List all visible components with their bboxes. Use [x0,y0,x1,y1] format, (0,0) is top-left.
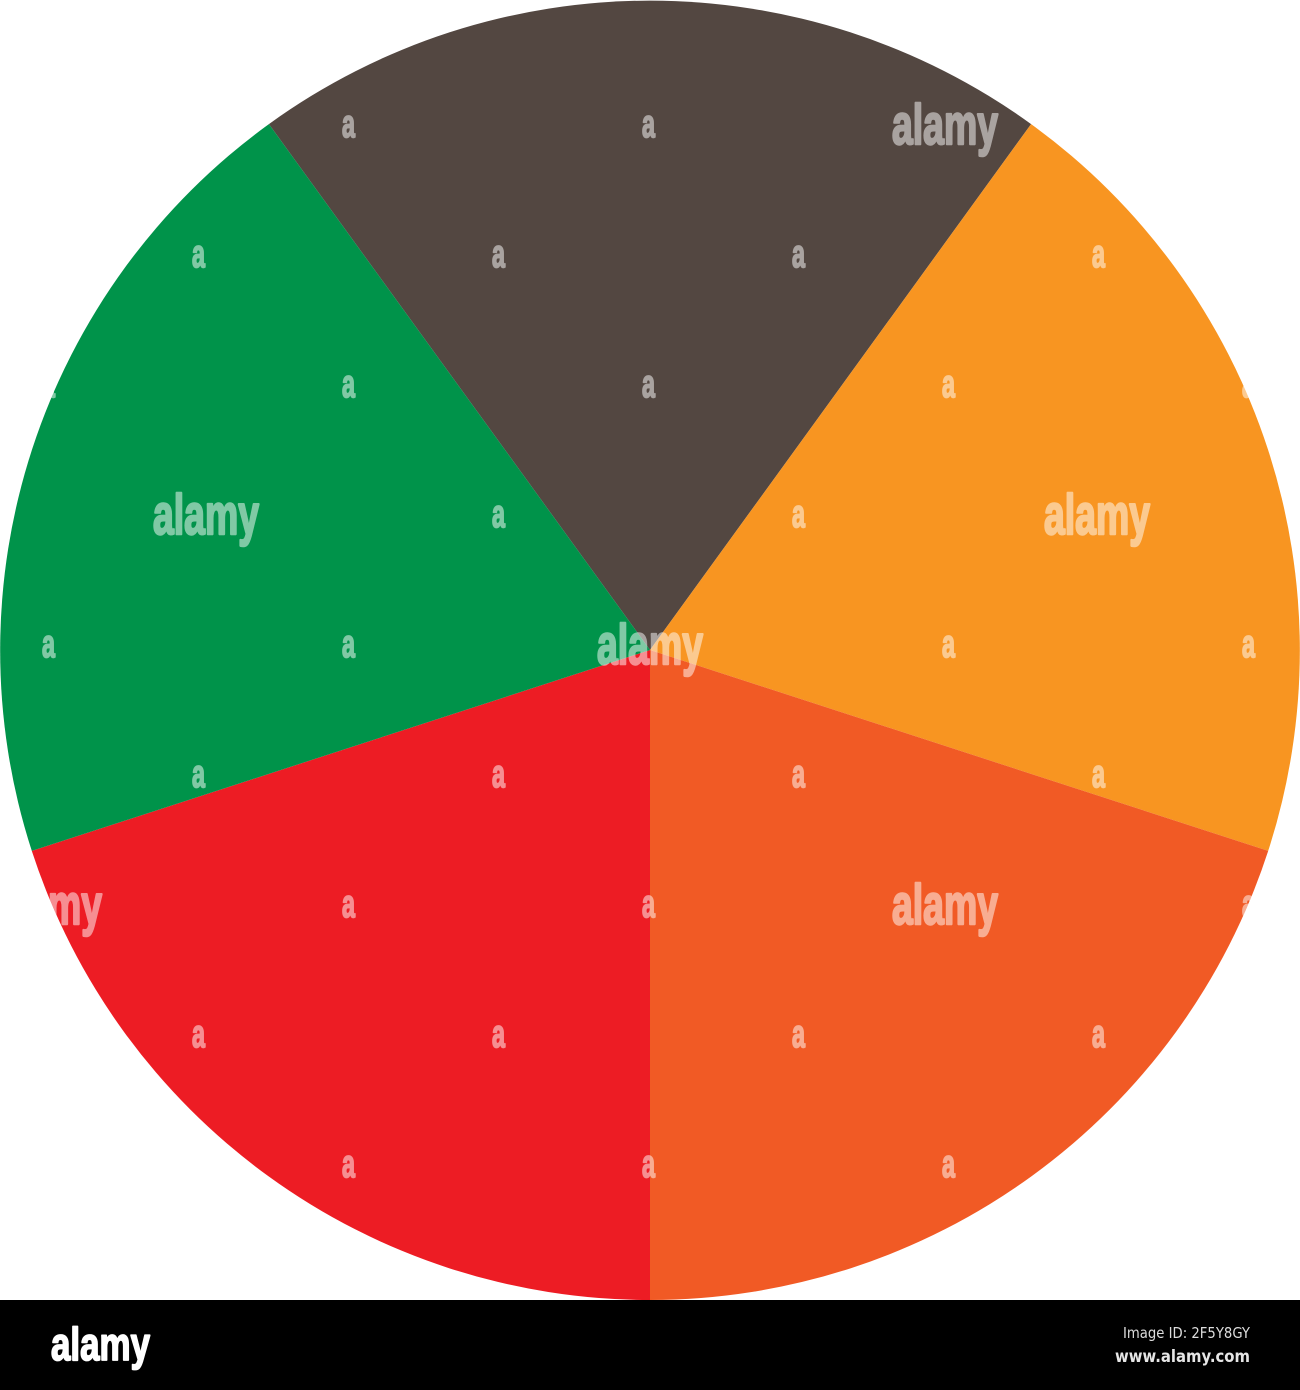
small watermarks: a [192,233,205,276]
small watermarks: a [1092,233,1105,276]
small watermarks: a [342,363,355,406]
large watermarks: alamy [892,93,998,157]
small watermarks: a [42,623,55,666]
small watermarks: a [792,493,805,536]
small watermarks: a [342,1143,355,1186]
large watermarks: alamy [597,613,703,677]
small watermarks: a [1092,1013,1105,1056]
segment: deep orange [650,650,1268,1300]
small watermarks: a [1242,623,1255,666]
small watermarks: a [192,753,205,796]
segment: green [0,124,650,851]
small watermarks: a [42,363,55,406]
image id: Image ID: 2F5Y8GY [1123,1324,1251,1342]
large watermarks: alamy [1044,483,1150,547]
small watermarks: a [492,1013,505,1056]
small watermarks: a [342,623,355,666]
small watermarks: a [642,103,655,146]
watermark overlay [0,93,1255,1186]
small watermarks: a [492,233,505,276]
segment: dark brown [269,1,1031,650]
small watermarks: a [342,103,355,146]
small watermarks: a [642,883,655,926]
small watermarks: a [492,493,505,536]
segment: amber orange [650,124,1300,851]
small watermarks: a [1242,363,1255,406]
small watermarks: a [642,1143,655,1186]
small watermarks: a [492,753,505,796]
large watermarks: alamy [0,873,102,937]
small watermarks: a [792,233,805,276]
small watermarks: a [1092,753,1105,796]
small watermarks: a [942,363,955,406]
footer logo: alamy [51,1318,150,1370]
small watermarks: a [342,883,355,926]
footer bar [0,1300,1300,1390]
large watermarks: alamy [153,483,259,547]
small watermarks: a [792,753,805,796]
small watermarks: a [942,623,955,666]
large watermarks [0,93,1150,937]
segment: red [32,650,650,1300]
large watermarks: alamy [892,873,998,937]
small watermarks: a [1242,883,1255,926]
small watermarks [42,103,1255,1186]
small watermarks: a [792,1013,805,1056]
small watermarks: a [642,363,655,406]
website: www.alamy.com [1115,1347,1250,1367]
small watermarks: a [942,1143,955,1186]
small watermarks: a [192,1013,205,1056]
